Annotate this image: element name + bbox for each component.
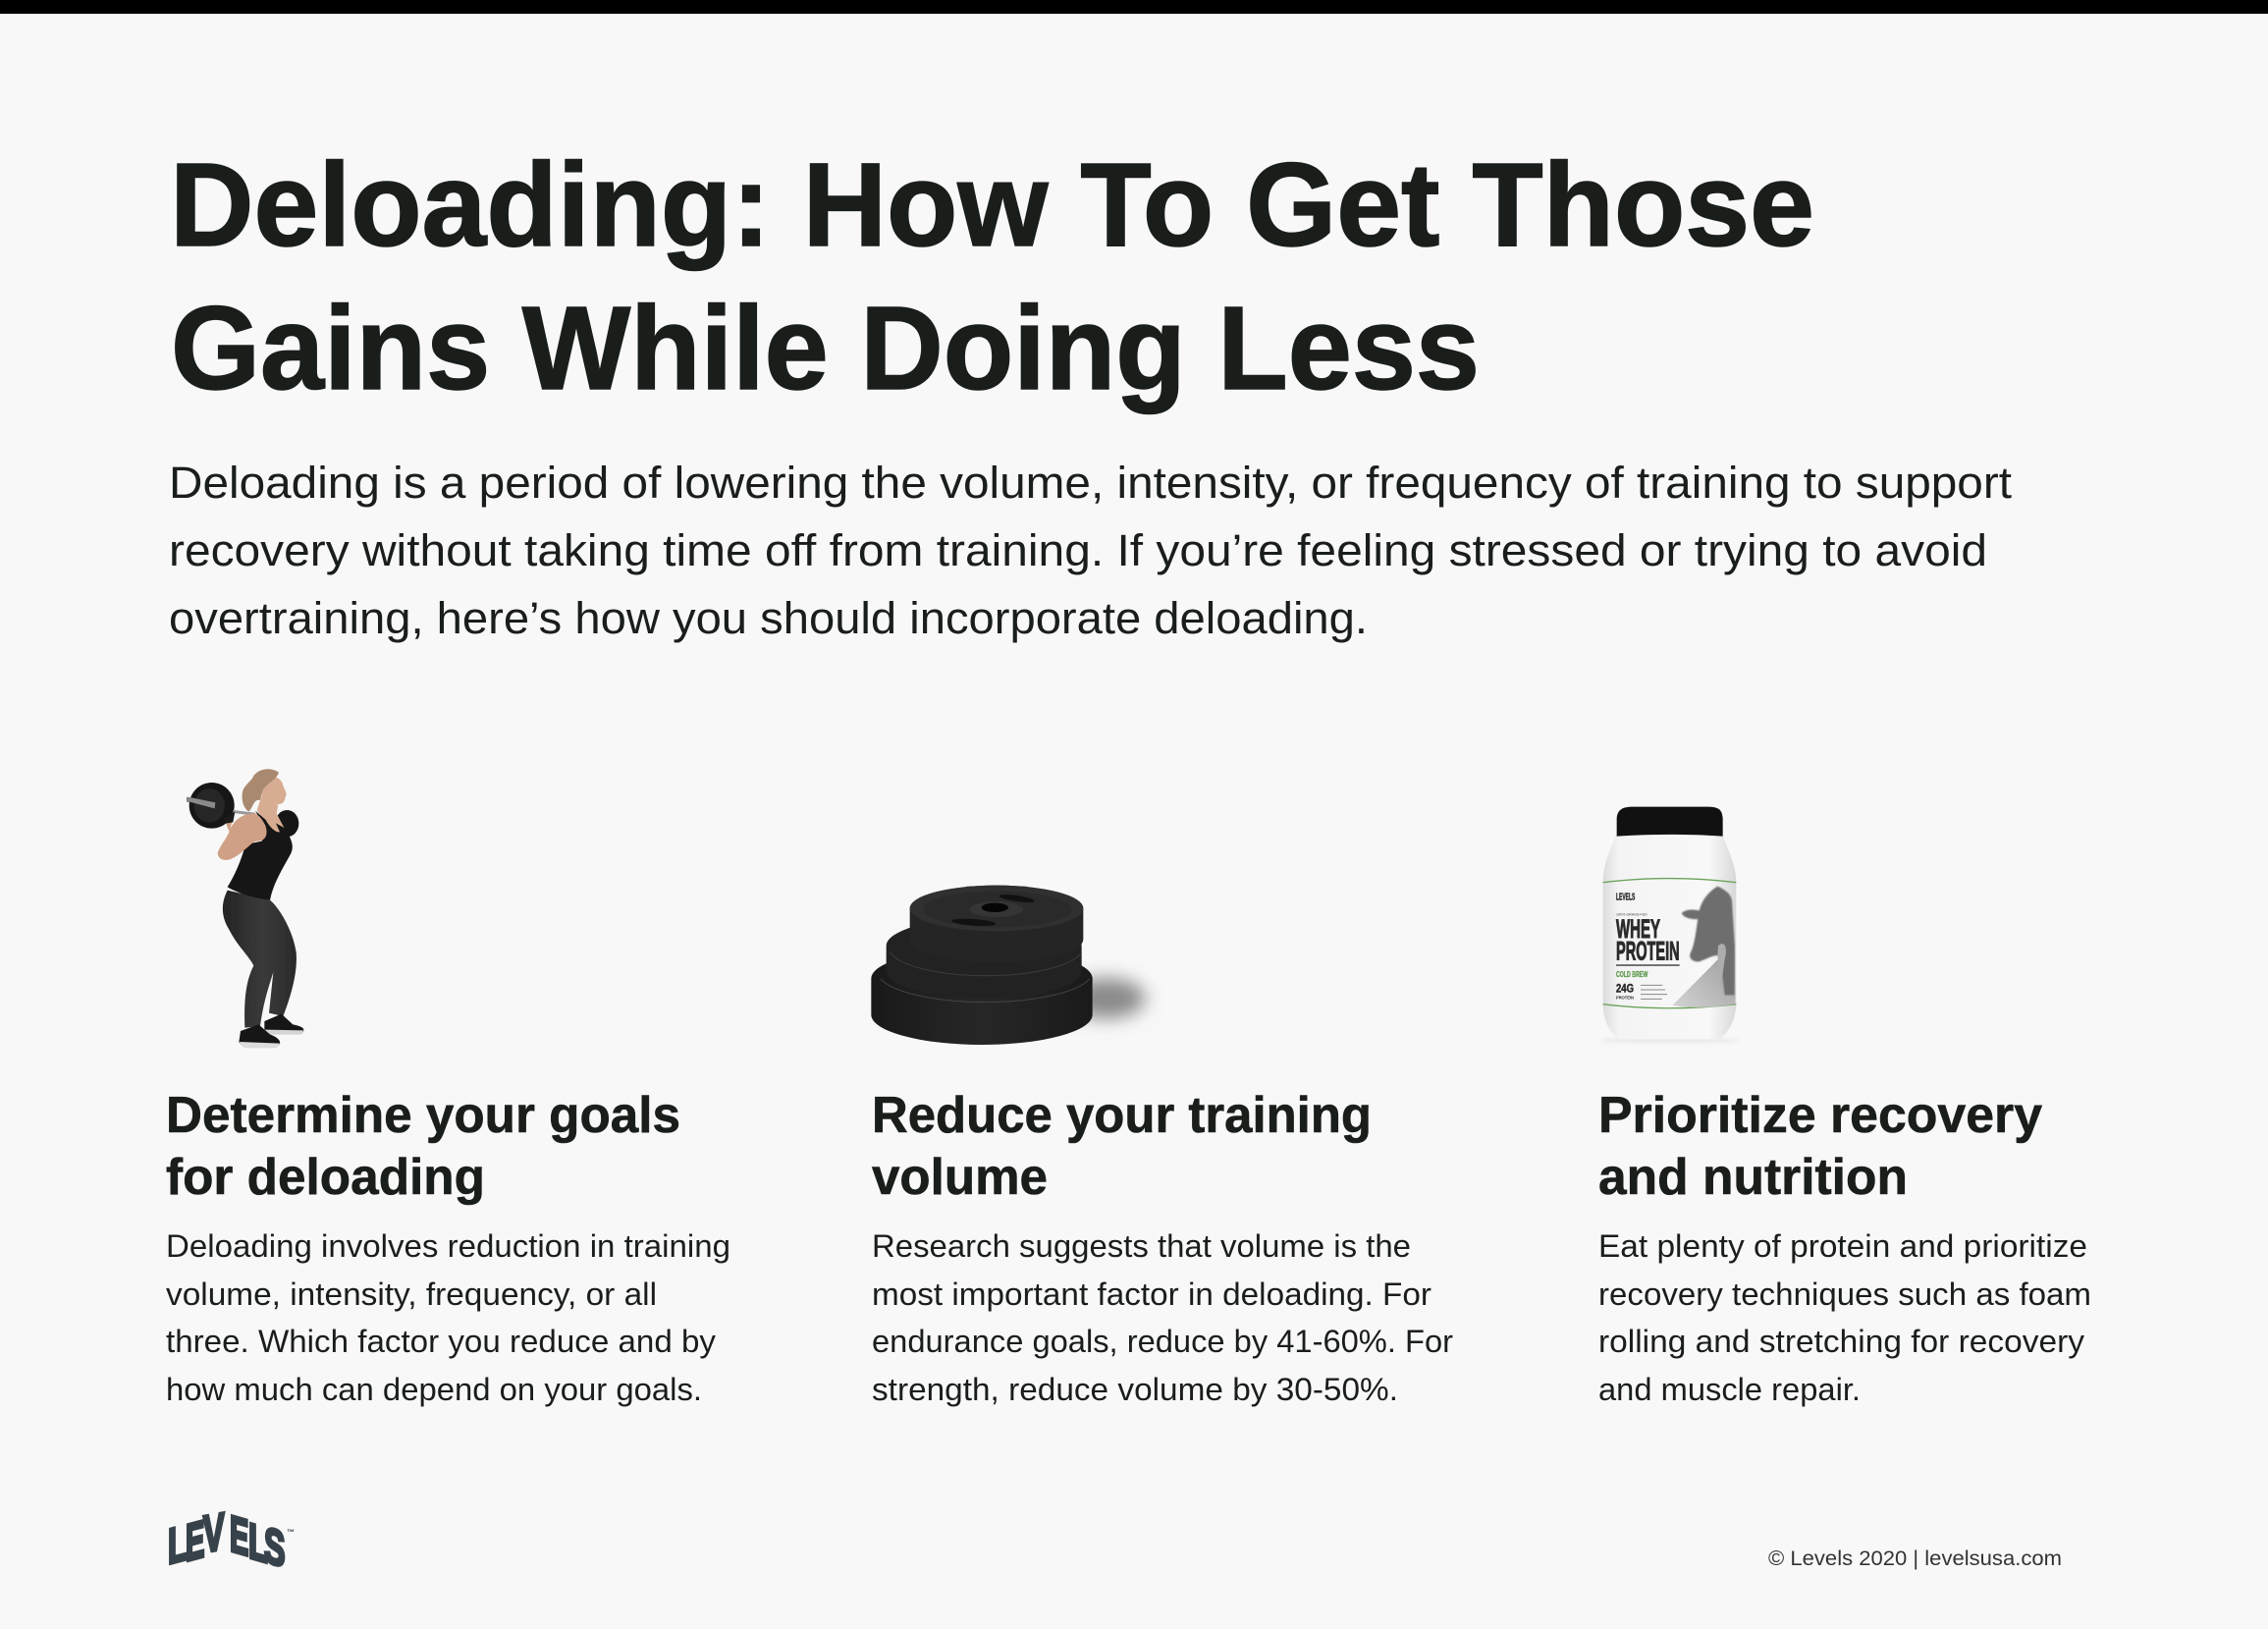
body text: reduce your training volume: most important factor in deloading. For [872,1276,1431,1312]
body text: prioritize recovery and nutrition: recovery techniques such as foam [1598,1276,2091,1312]
heading: reduce your training volume: Reduce your training [872,1087,1372,1144]
body text: prioritize recovery and nutrition: Eat plenty of protein and prioritize [1598,1228,2087,1264]
icon: whey protein jar: PROTEIN [1616,996,1634,1002]
body text: prioritize recovery and nutrition: and muscle repair. [1598,1372,1861,1407]
intro text [169,458,2013,643]
logo: Levels: L [168,1515,188,1576]
logo: Levels: E [230,1505,248,1568]
body text: reduce your training volume: Research suggests that volume is the [872,1228,1411,1264]
heading: determine your goals: Determine your goals [166,1087,680,1144]
body text: reduce your training volume [872,1228,1453,1407]
panel: reduce your training volume [871,886,1453,1407]
icon: whey protein jar: 24G [1616,982,1634,996]
logo: Levels: V [203,1502,225,1564]
body text: determine your goals: volume, intensity, frequency, or all [166,1276,657,1312]
title [170,137,1814,414]
icon: whey protein jar: 100% GRASS-FED [1616,913,1647,917]
body text: determine your goals: how much can depend on your goals. [166,1372,702,1407]
icon: whey protein jar [1598,807,1740,1043]
intro text: Deloading is a period of lowering the volume, intensity, or frequency of training to support [169,458,2013,508]
icon: whey protein jar: WHEY [1616,914,1660,944]
heading: prioritize recovery and nutrition: and nutrition [1598,1149,1908,1206]
panel: determine your goals [166,769,730,1407]
body text: prioritize recovery and nutrition: rolling and stretching for recovery [1598,1324,2085,1359]
logo: Levels: S [264,1517,285,1579]
heading: prioritize recovery and nutrition: Prioritize recovery [1598,1087,2042,1144]
body text: determine your goals: Deloading involves reduction in training [166,1228,730,1264]
icon: whey protein jar: PROTEIN [1616,937,1680,966]
footer credit: © Levels 2020 | levelsusa.com [1768,1548,2062,1570]
body text: prioritize recovery and nutrition [1598,1228,2091,1407]
body text: determine your goals [166,1228,730,1407]
panel: prioritize recovery and nutrition [1598,807,2091,1407]
logo: Levels [168,1502,295,1579]
body text: reduce your training volume: strength, reduce volume by 30-50%. [872,1372,1398,1407]
intro text: overtraining, here’s how you should incorporate deloading. [169,593,1368,643]
body text: reduce your training volume: endurance goals, reduce by 41-60%. For [872,1324,1453,1359]
heading: determine your goals: for deloading [166,1149,485,1206]
icon: whey protein jar: COLD BREW [1616,969,1647,979]
logo: Levels: L [248,1513,268,1574]
icon: whey protein jar: LEVELS [1616,893,1635,903]
logo: Levels: E [186,1510,204,1573]
intro text: recovery without taking time off from training. If you’re feeling stressed or trying to avoid [169,525,1987,575]
heading: prioritize recovery and nutrition [1598,1087,2042,1206]
heading: reduce your training volume: volume [872,1149,1048,1206]
body text: determine your goals: three. Which factor you reduce and by [166,1324,717,1359]
logo: Levels: ™ [287,1528,295,1537]
title: Gains While Doing Less [171,281,1480,414]
icon: woman squatting with barbell [187,769,303,1048]
icon: stack of weight plates [871,886,1146,1045]
heading: reduce your training volume [872,1087,1372,1206]
heading: determine your goals [166,1087,680,1206]
title: Deloading: How To Get Those [170,137,1814,271]
